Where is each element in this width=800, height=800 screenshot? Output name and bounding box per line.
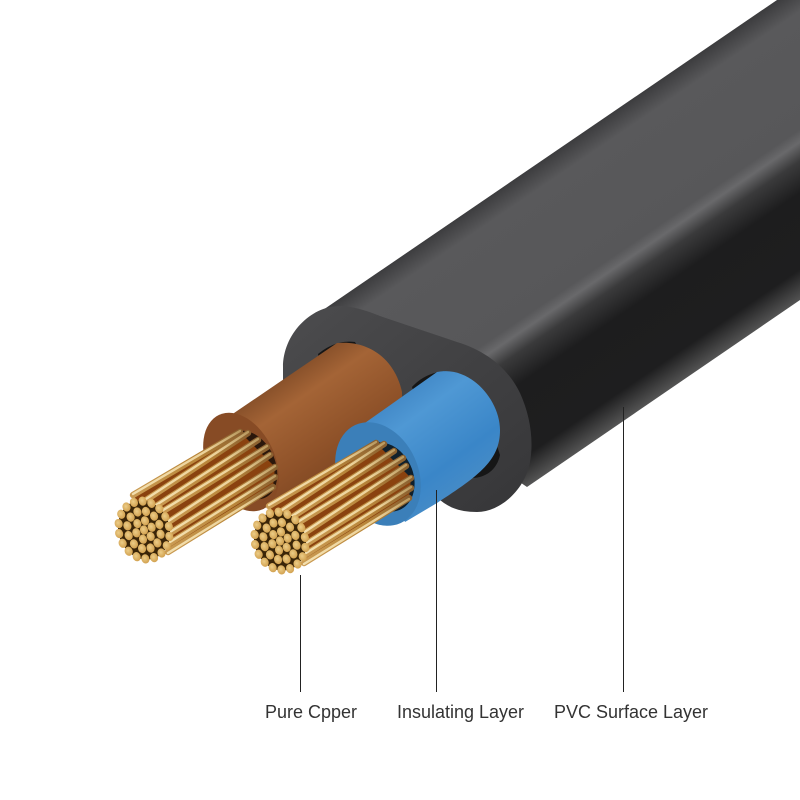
blue insulated core (319, 371, 500, 540)
blue conductor opening (412, 371, 500, 478)
label: PVC Surface Layer: PVC Surface Layer (554, 702, 708, 722)
brown insulated core (188, 343, 402, 523)
brown conductor opening (318, 342, 385, 400)
leader line: insulation (436, 490, 438, 692)
brown core hole (212, 422, 288, 508)
PVC jacket end face (283, 306, 532, 512)
leader line: PVC (622, 407, 624, 692)
label: Pure Cpper: Pure Cpper (265, 702, 357, 722)
copper wire bundle: brown core (106, 431, 275, 572)
leader line: copper (300, 575, 302, 692)
PVC jacket body (320, 0, 800, 487)
brown insulation ring (188, 401, 294, 523)
blue core hole (344, 433, 426, 521)
blue insulation tube (345, 371, 500, 522)
brown insulation tube (212, 343, 402, 510)
label: Insulating Layer: Insulating Layer (397, 702, 524, 722)
blue insulation ring (319, 408, 437, 540)
copper wire bundle: blue core (242, 442, 411, 583)
